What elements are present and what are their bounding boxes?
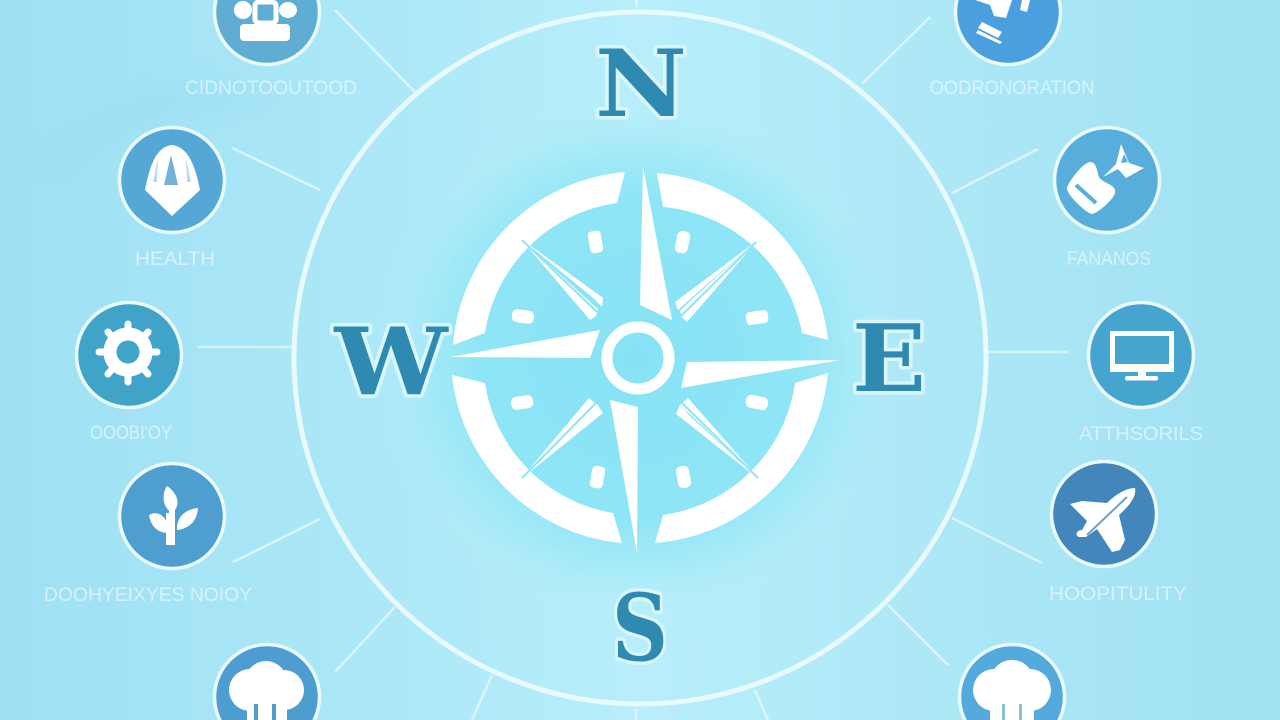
label: health: HEALTH [135,249,215,270]
ring segment NW [453,172,625,345]
label: finance: FANANOS [1067,249,1151,270]
node: bottom right [960,644,1064,720]
node: plane [1052,462,1156,566]
needle NW [520,238,603,320]
letter S: S [612,573,668,682]
node: left gear [76,302,182,408]
tick marks [510,230,769,489]
label: plant: DOOHYEIXYES NOIOY [44,585,252,606]
needle SE [676,398,760,480]
node: bottom left [214,644,320,720]
letter E: E [852,304,926,413]
needle NE [675,240,758,322]
label: plane: HOOPITULITY [1049,584,1187,605]
north blade [640,167,672,320]
label: top left: CIDNOTOOUTOOD [185,78,357,99]
compass glow [371,93,901,623]
ring segment NE [657,173,828,340]
compass rose [450,167,840,553]
ring segment SE [655,373,828,543]
west blade [450,330,600,358]
node: plant [120,464,224,568]
east blade [681,360,840,388]
icon: chef hat [973,660,1051,720]
label: top right: OODRONORATION [930,78,1094,99]
node: top left [214,0,320,64]
connector lines [198,0,1068,720]
icon: plant [149,486,198,545]
faint background arc [40,85,300,180]
label: left gear: OOOBI'OY [90,423,172,444]
icon: chef hat [229,661,304,720]
ring segment SW [452,375,622,543]
node: monitor [1088,302,1194,408]
node: finance [1054,128,1160,232]
node: health [120,128,224,232]
icon: robot [234,1,297,41]
center ring [607,327,669,389]
icon: gear [99,324,157,382]
letter N: N [595,29,687,138]
south blade [610,400,638,553]
outer compass ring [294,12,986,704]
icon: hammer [975,0,1030,44]
icon: dome gem [145,145,200,216]
letter W: W [333,307,449,416]
icon: tag and arrow [1067,144,1144,214]
node: top right [956,0,1060,64]
needle SW [520,398,603,480]
label: monitor: ATTHSORILS [1079,424,1203,445]
icon: plane [1070,488,1135,552]
icon: monitor [1110,331,1174,380]
